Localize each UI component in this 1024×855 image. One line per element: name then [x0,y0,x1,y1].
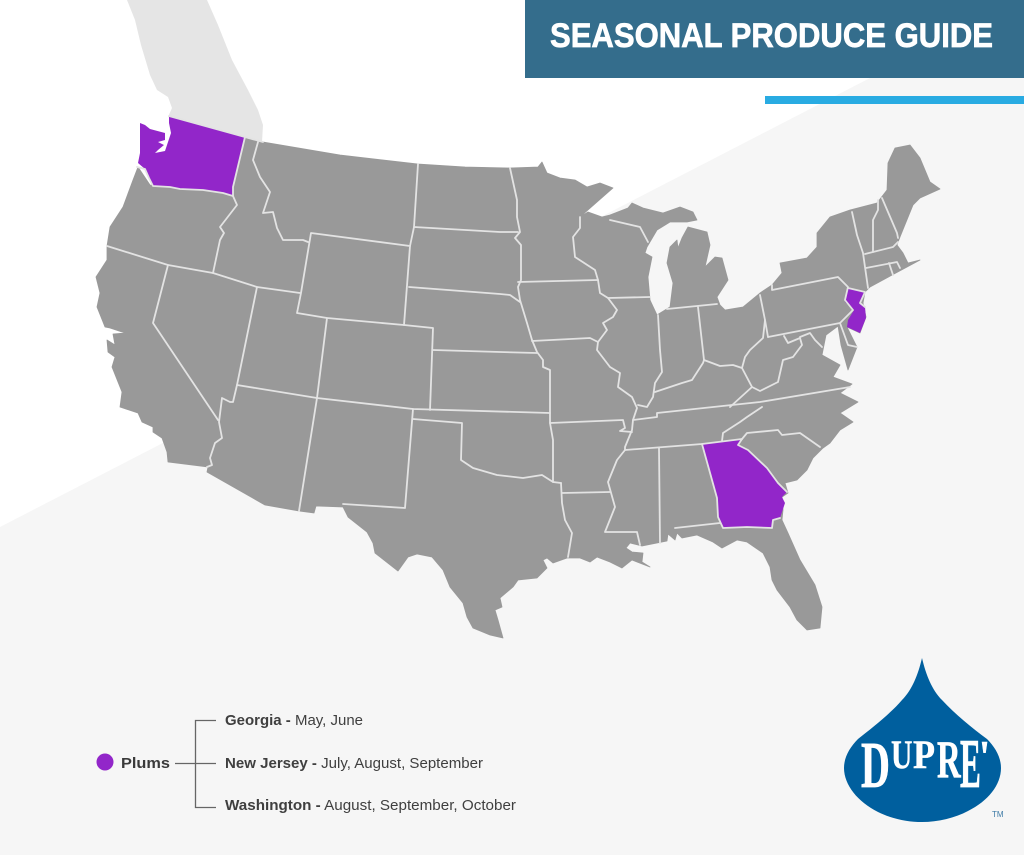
legend label: plums: Plums [121,755,170,772]
legend row: Washington: Washington - August, September, October [225,797,516,814]
logo wordmark: R [937,730,962,789]
map: contiguous United States [96,116,940,638]
legend connector [175,720,216,808]
state: New Jersey (highlighted) [845,288,866,333]
state: Georgia (highlighted) [702,439,787,528]
logo wordmark: ' [979,733,990,783]
logo wordmark [861,725,990,803]
logo wordmark: E [960,725,981,803]
land silhouette [96,137,940,638]
logo: Dupre' drop [844,658,1004,822]
legend [96,712,516,814]
accent bar [765,96,1024,104]
state borders [107,116,900,557]
logo wordmark: U [891,733,912,777]
logo wordmark: P [913,733,935,777]
title: SEASONAL PRODUCE GUIDE [550,17,993,55]
logo drop shape [844,658,1001,822]
title banner [525,0,1024,78]
region: Canada landmass [127,0,263,142]
legend row: New Jersey: New Jersey - July, August, September [225,755,483,772]
logo wordmark: D [861,728,890,802]
state: Washington (highlighted) [138,116,245,196]
legend row: Georgia: Georgia - May, June [225,712,363,729]
legend marker: plums [96,754,114,770]
trademark: TM [992,810,1004,819]
